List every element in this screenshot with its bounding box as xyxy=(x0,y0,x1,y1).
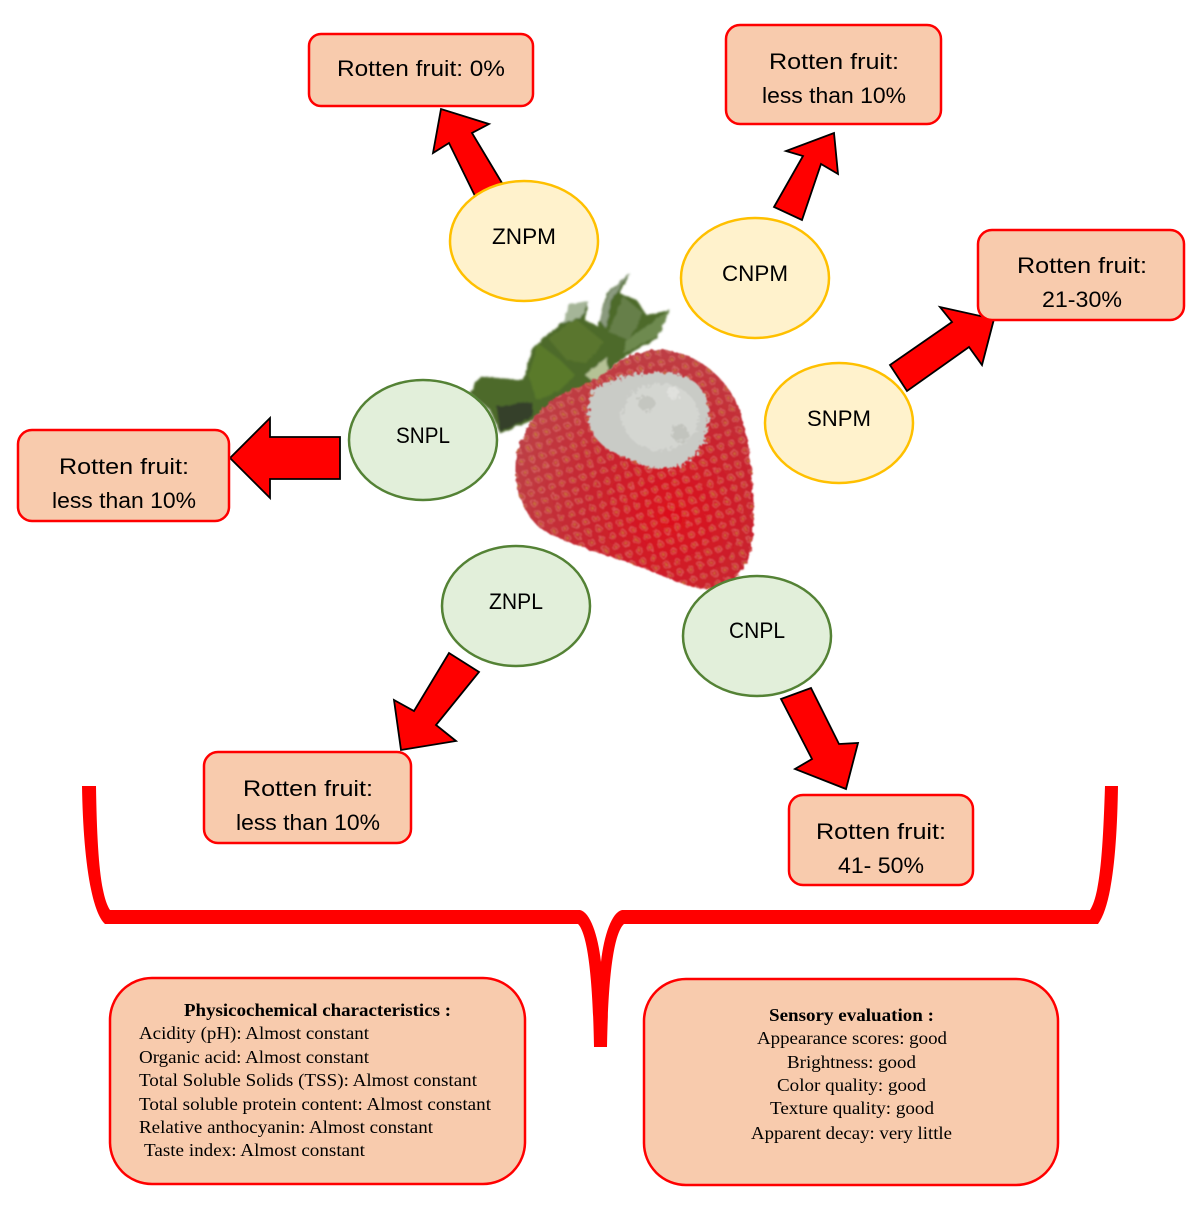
panel: sensory evaluation: Color quality: good xyxy=(777,1075,926,1095)
panel: sensory evaluation: Texture quality: good xyxy=(770,1098,934,1118)
curly brace connector xyxy=(82,786,1118,1047)
node: ZNPM xyxy=(450,181,598,301)
panel: sensory evaluation: Apparent decay: very little xyxy=(751,1123,952,1143)
arrow: CNPL to result xyxy=(781,688,858,789)
node: ZNPL xyxy=(442,546,590,666)
strawberry illustration xyxy=(470,273,754,589)
node: ZNPL: ZNPL xyxy=(489,589,543,614)
arrow: ZNPL to result xyxy=(394,653,479,750)
arrow: CNPM to result xyxy=(774,133,838,220)
node: CNPL: CNPL xyxy=(729,618,785,643)
panel: physicochemical characteristics xyxy=(110,978,525,1184)
panel: physicochemical characteristics: Taste index: Almost constant xyxy=(144,1140,365,1160)
result box: SNPM 21-30%: 21-30% xyxy=(1042,287,1122,312)
node: SNPM xyxy=(765,363,913,483)
node: CNPM: CNPM xyxy=(722,261,788,286)
node: CNPL xyxy=(683,576,831,696)
panel: physicochemical characteristics: Organic acid: Almost constant xyxy=(139,1047,369,1067)
result box: CNPL 41-50%: Rotten fruit: xyxy=(816,819,946,844)
node: ZNPM: ZNPM xyxy=(492,224,556,249)
result box: SNPM 21-30% xyxy=(978,230,1184,320)
strawberry leaves xyxy=(470,273,670,433)
result box: ZNPL less than 10% xyxy=(204,752,411,843)
result box: SNPM 21-30%: Rotten fruit: xyxy=(1017,253,1147,278)
strawberry body xyxy=(515,350,754,589)
panel: physicochemical characteristics: Total Soluble Solids (TSS): Almost constant xyxy=(139,1070,477,1091)
panel: physicochemical characteristics: Total soluble protein content: Almost constant xyxy=(139,1094,491,1114)
arrow: SNPM to result xyxy=(890,307,994,391)
node: SNPL xyxy=(349,380,497,500)
result box: SNPL less than 10%: Rotten fruit: xyxy=(59,454,189,479)
result box: ZNPL less than 10%: less than 10% xyxy=(236,810,380,835)
result box: CNPL 41-50% xyxy=(789,795,973,885)
result box: ZNPM 0% xyxy=(309,34,533,106)
arrow: ZNPM to result xyxy=(433,109,502,196)
panel: sensory evaluation xyxy=(644,979,1058,1185)
result box: CNPM less than 10%: Rotten fruit: xyxy=(769,49,899,74)
result box: SNPL less than 10%: less than 10% xyxy=(52,488,196,513)
panel: physicochemical characteristics: Physicochemical characteristics : xyxy=(184,1000,451,1020)
node: SNPL: SNPL xyxy=(396,423,450,448)
node: SNPM: SNPM xyxy=(807,406,871,431)
result box: CNPL 41-50%: 41- 50% xyxy=(838,853,924,878)
result box: SNPL less than 10% xyxy=(18,430,229,521)
node: CNPM xyxy=(681,218,829,338)
result box: ZNPM 0%: Rotten fruit: 0% xyxy=(337,56,505,81)
panel: sensory evaluation: Appearance scores: good xyxy=(757,1028,947,1048)
result box: ZNPL less than 10%: Rotten fruit: xyxy=(243,776,373,801)
result box: CNPM less than 10% xyxy=(726,25,941,124)
result box: CNPM less than 10%: less than 10% xyxy=(762,83,906,108)
white mold patch xyxy=(588,372,709,469)
panel: sensory evaluation: Brightness: good xyxy=(787,1052,916,1072)
arrow: SNPL to result xyxy=(230,418,340,498)
panel: sensory evaluation: Sensory evaluation : xyxy=(769,1005,934,1025)
panel: physicochemical characteristics: Relative anthocyanin: Almost constant xyxy=(139,1117,433,1137)
panel: physicochemical characteristics: Acidity (pH): Almost constant xyxy=(139,1023,369,1044)
